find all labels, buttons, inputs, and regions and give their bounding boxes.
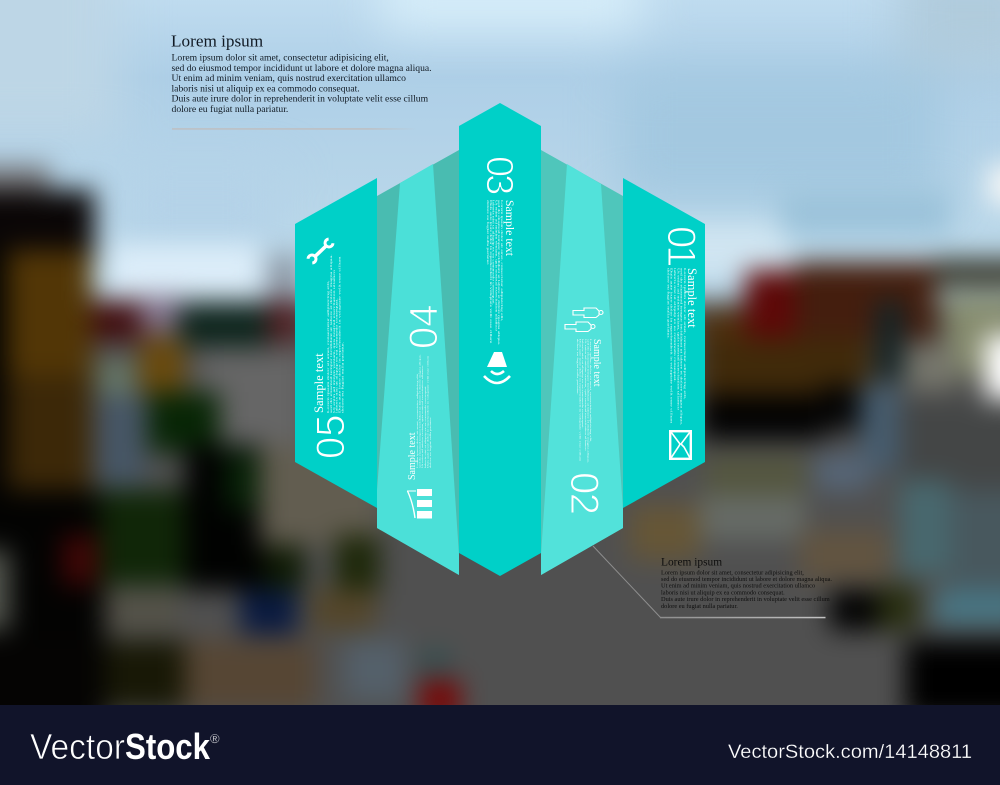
header paragraph: laboris nisi ut aliquip ex ea commodo consequat. [172,83,360,94]
sample text 03: Sample text [503,200,517,257]
sample text 01: Sample text [685,268,699,328]
paragraph 02: sed do eiusmod tempor incididunt ut labore et dolore magna aliqua. [587,339,589,463]
paragraph 02: Ut enim ad minim veniam, quis nostrud exercitation ullamco [583,339,587,451]
paragraph 01: sed do eiusmod tempor incididunt ut labore et dolore magna aliqua. [679,268,683,425]
paragraph 02: Lorem ipsum dolor sit amet, consectetur adipisicing elit, [589,339,592,443]
icon: bar chart cart [407,489,432,518]
number 05: 05 [309,414,353,459]
callout paragraph [661,569,832,610]
callout paragraph: Ut enim ad minim veniam, quis nostrud exercitation ullamco [661,583,815,590]
header paragraph: Lorem ipsum dolor sit amet, consectetur adipisicing elit, [172,52,389,64]
icon: speaker [484,352,510,383]
panel 02 content [562,308,606,514]
paragraph 05: dolore eu fugiat nulla pariatur. [341,342,344,413]
sample text 02: Sample text [591,339,602,387]
paragraph 04: Ut enim ad minim veniam, quis nostrud exercitation ullamco [421,365,425,468]
callout paragraph: dolore eu fugiat nulla pariatur. [661,603,738,610]
header paragraph: sed do eiusmod tempor incididunt ut labore et dolore magna aliqua. [172,63,432,74]
panel 05 [295,178,377,508]
header paragraph: Ut enim ad minim veniam, quis nostrud exercitation ullamco [172,73,406,84]
panel 04 content [402,304,446,518]
callout paragraph: laboris nisi ut aliquip ex ea commodo consequat. [661,589,785,596]
paragraph 05: sed do eiusmod tempor incididunt ut labore et dolore magna aliqua. [330,254,333,413]
panel 05 content [308,239,353,459]
panel 02: folded light strip [541,150,623,575]
paragraph 03: Lorem ipsum dolor sit amet, consectetur adipisicing elit, [500,200,503,321]
footer logo: Stock [125,726,211,767]
callout paragraph: sed do eiusmod tempor incididunt ut labore et dolore magna aliqua. [661,576,832,583]
paragraph 01: Lorem ipsum dolor sit amet, consectetur adipisicing elit, [683,268,686,399]
paragraph 05: Ut enim ad minim veniam, quis nostrud exercitation ullamco [332,269,336,413]
paragraph 03 [486,200,503,345]
paragraph 04: laboris nisi ut aliquip ex ea commodo consequat. [424,386,427,468]
paragraph 02: laboris nisi ut aliquip ex ea commodo consequat. [582,339,584,429]
paragraph 05: laboris nisi ut aliquip ex ea commodo consequat. [335,298,338,413]
header leader line [172,128,417,130]
header paragraph: Duis aute irure dolor in reprehenderit in voluptate velit esse cillum [172,94,429,105]
panel 01 [623,178,705,508]
panel 03 [459,103,541,576]
paragraph 05: Duis aute irure dolor in reprehenderit in voluptate velit esse cillum [338,256,341,413]
footer logo: ® [210,731,220,746]
sample text 05: Sample text [312,353,326,413]
paragraph 03: dolore eu fugiat nulla pariatur. [486,200,489,265]
paragraph 01: Ut enim ad minim veniam, quis nostrud exercitation ullamco [676,268,679,411]
paragraph 01 [666,268,686,425]
header text block [171,32,432,115]
number 03: 03 [478,156,520,194]
paragraph 04: Lorem ipsum dolor sit amet, consectetur adipisicing elit, [416,373,419,468]
paragraph 03: laboris nisi ut aliquip ex ea commodo consequat. [492,200,495,305]
sample text 04: Sample text [407,432,418,480]
paragraph 05 [327,254,344,413]
callout paragraph: Lorem ipsum dolor sit amet, consectetur adipisicing elit, [661,569,804,576]
callout paragraph: Duis aute irure dolor in reprehenderit in voluptate velit esse cillum [661,596,830,603]
footer image id: VectorStock.com/14148811 [728,741,972,763]
callout text block [661,556,832,610]
footer bar [0,705,1000,785]
icon: envelope [670,431,691,459]
panel 04: folded light strip [377,150,459,575]
paragraph 01: Duis aute irure dolor in reprehenderit in voluptate velit esse cillum [669,268,673,424]
paragraph 02: Duis aute irure dolor in reprehenderit in voluptate velit esse cillum [579,339,582,461]
paragraph 02 [576,339,592,463]
paragraph 03: sed do eiusmod tempor incididunt ut labore et dolore magna aliqua. [498,200,501,345]
header paragraph [172,52,432,115]
footer logo [30,726,220,767]
panel 03 content [478,156,520,383]
paragraph 04: sed do eiusmod tempor incididunt ut labore et dolore magna aliqua. [418,354,421,468]
paragraph 02: dolore eu fugiat nulla pariatur. [576,339,579,395]
paragraph 03: Duis aute irure dolor in reprehenderit in voluptate velit esse cillum [489,200,492,344]
footer logo: Vector [30,726,125,767]
header paragraph: dolore eu fugiat nulla pariatur. [172,104,288,115]
icon: wrench [308,239,333,263]
paragraph 01: laboris nisi ut aliquip ex ea commodo consequat. [673,268,676,382]
panel 01 content [659,226,703,459]
paragraph 01: dolore eu fugiat nulla pariatur. [666,268,669,339]
icon: two figures [565,308,603,332]
paragraph 04 [416,354,432,468]
callout title: Lorem ipsum [661,556,722,568]
paragraph 03: Ut enim ad minim veniam, quis nostrud exercitation ullamco [494,200,498,331]
number 02: 02 [562,472,606,514]
paragraph 05: Lorem ipsum dolor sit amet, consectetur adipisicing elit, [327,281,330,413]
paragraph 04: dolore eu fugiat nulla pariatur. [429,417,432,468]
callout leader line [593,546,826,618]
number 04: 04 [402,304,446,349]
paragraph 04: Duis aute irure dolor in reprehenderit in voluptate velit esse cillum [426,356,429,468]
number 01: 01 [659,226,703,266]
header title: Lorem ipsum [171,32,264,50]
